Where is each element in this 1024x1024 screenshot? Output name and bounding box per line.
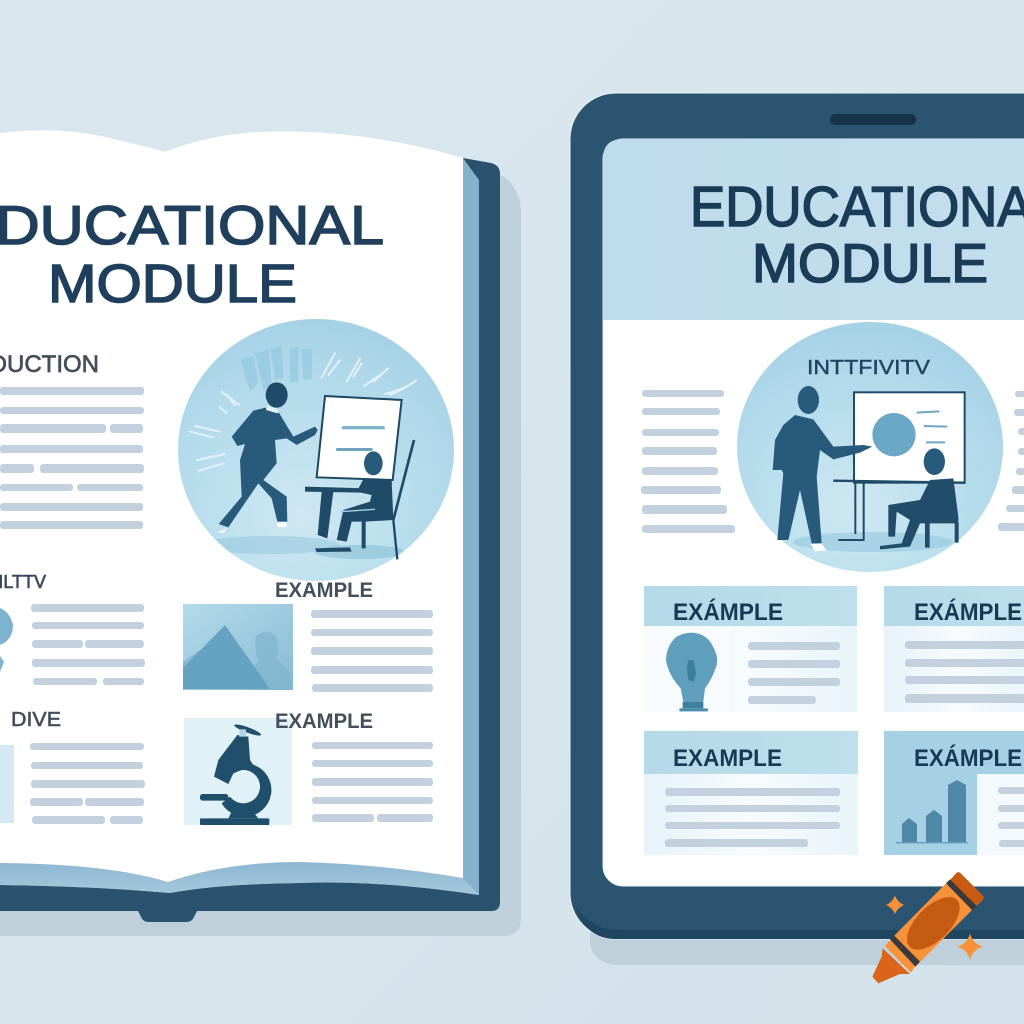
book cover: [0, 158, 500, 922]
heading: book title: [0, 194, 384, 314]
heading: book title: MODULE: [48, 254, 297, 314]
text lines: deep dive: [30, 743, 145, 824]
tablet shadow: [590, 930, 1024, 965]
screen header: [603, 139, 1024, 320]
desk: [833, 481, 965, 483]
text lines: left of illustration: [641, 390, 735, 533]
image: microscope: [184, 718, 292, 825]
whiteboard: [317, 396, 402, 480]
card: example right: [884, 586, 1024, 712]
icon: orange crayon with sparkles: [872, 872, 984, 983]
speaker notch: [830, 114, 916, 125]
text lines: introduction: [0, 387, 144, 529]
text lines: right of illustration: [998, 391, 1024, 531]
whiteboard: [854, 392, 965, 483]
card: example text only: EXAMPLE: [673, 745, 782, 772]
card: example text only: [644, 731, 858, 855]
page edges: [0, 158, 479, 895]
tablet body: [570, 93, 1024, 939]
text lines: activity: [31, 604, 145, 685]
heading: tablet title: [690, 175, 1024, 294]
white page: [0, 130, 463, 882]
figure: standing teacher: [219, 407, 318, 527]
book shadow: [0, 175, 521, 936]
card: example with lightbulb: [644, 586, 857, 712]
icon: lightbulb: [666, 633, 717, 711]
open book: [0, 130, 521, 936]
image: cropped panel: [0, 745, 14, 823]
card: example with bar chart: [884, 731, 1024, 855]
screen: [603, 139, 1024, 886]
heading: example 1: EXAMPLE: [275, 579, 373, 602]
label: activity: INTTFIVITV: [807, 357, 931, 379]
heading: example 2: EXAMPLE: [275, 710, 373, 733]
figure: standing teacher: [798, 386, 819, 414]
figure: seated student: [924, 448, 945, 475]
bar chart: [896, 780, 968, 844]
text lines: example 1: [311, 610, 433, 692]
text lines: example 2: [312, 742, 433, 822]
icon: cropped blue shape: [0, 608, 13, 672]
image: pyramid: [183, 604, 293, 690]
illustration: teacher and student in circle: [178, 319, 454, 581]
tablet: [570, 93, 1024, 965]
heading: deep dive: DIVE: [11, 709, 61, 731]
card: example with lightbulb: EXÁMPLE: [673, 598, 783, 626]
heading: tablet title: MODULE: [752, 232, 988, 294]
figure: seated student: [305, 487, 367, 493]
illustration: teacher at whiteboard in circle: [737, 322, 1003, 572]
